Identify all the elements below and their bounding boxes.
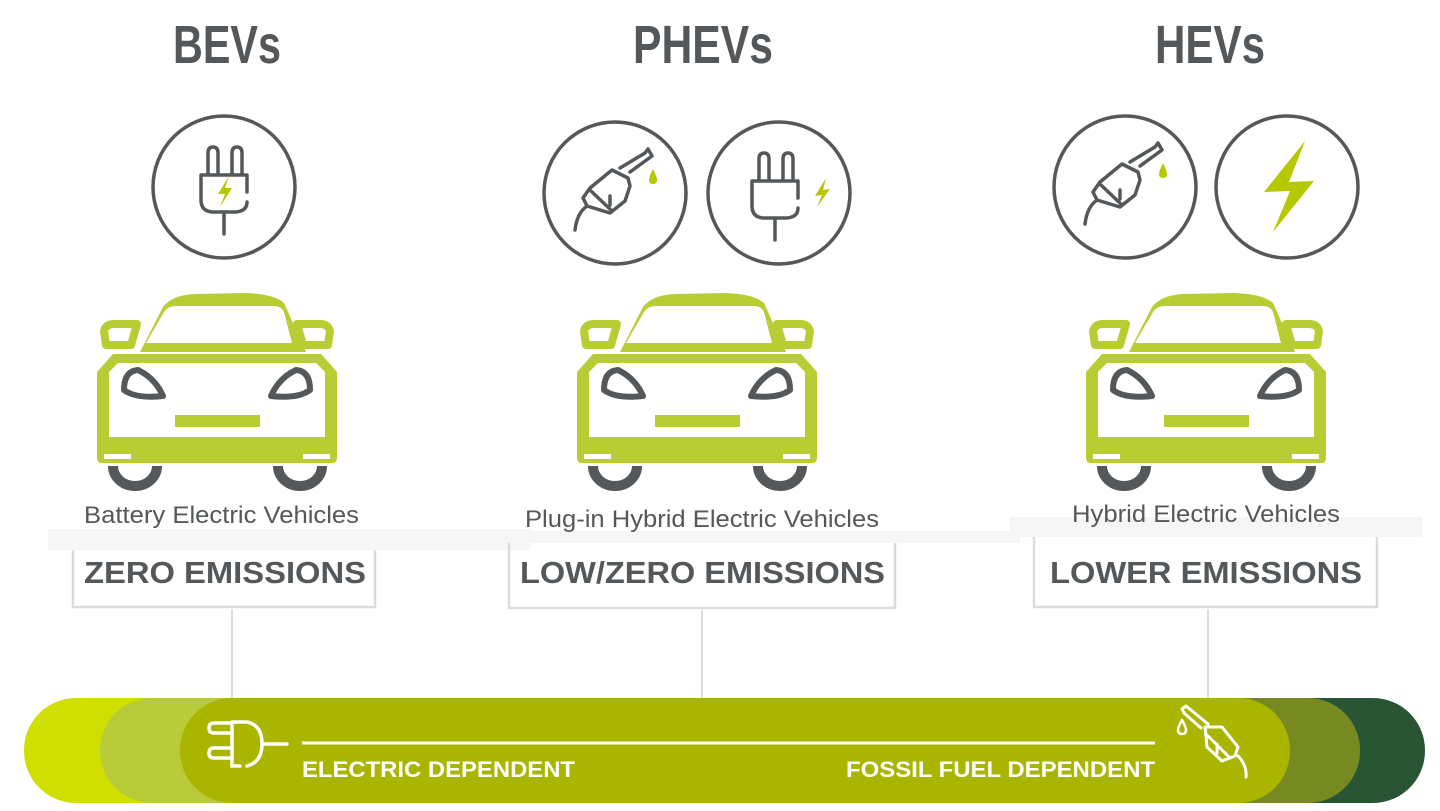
label: HEV subtitle: Hybrid Electric Vehicles <box>1072 501 1340 528</box>
icon: PHEV fuel circle <box>544 122 686 264</box>
car: BEV <box>97 293 337 486</box>
box: zero emissions <box>73 550 375 607</box>
car: HEV <box>1086 293 1326 486</box>
icon: BEV plug circle <box>153 116 295 258</box>
icon: PHEV plug circle <box>708 122 850 264</box>
icon: HEV lightning circle <box>1216 116 1358 258</box>
box: low/zero emissions <box>509 543 895 608</box>
box: zero emissions: ZERO EMISSIONS <box>84 555 366 590</box>
box: low/zero emissions: LOW/ZERO EMISSIONS <box>520 555 885 590</box>
spectrum bar <box>24 698 1425 803</box>
label: fossil fuel dependent: FOSSIL FUEL DEPENDENT <box>846 757 1156 782</box>
label: electric dependent: ELECTRIC DEPENDENT <box>302 757 576 782</box>
label: BEV subtitle: Battery Electric Vehicles <box>84 502 359 529</box>
icon: white plug <box>209 722 287 766</box>
title: HEVs: HEVs <box>1155 15 1265 75</box>
title: PHEVs: PHEVs <box>633 15 773 75</box>
label: PHEV subtitle: Plug-in Hybrid Electric Vehicles <box>525 506 879 533</box>
box: lower emissions <box>1034 537 1377 607</box>
car: PHEV <box>577 293 817 486</box>
connector lines <box>231 609 233 698</box>
box: lower emissions: LOWER EMISSIONS <box>1050 555 1362 590</box>
icon: white nozzle <box>1178 706 1246 777</box>
gray bands <box>48 529 530 550</box>
icon: HEV fuel circle <box>1054 116 1196 258</box>
title: BEVs: BEVs <box>173 15 281 75</box>
